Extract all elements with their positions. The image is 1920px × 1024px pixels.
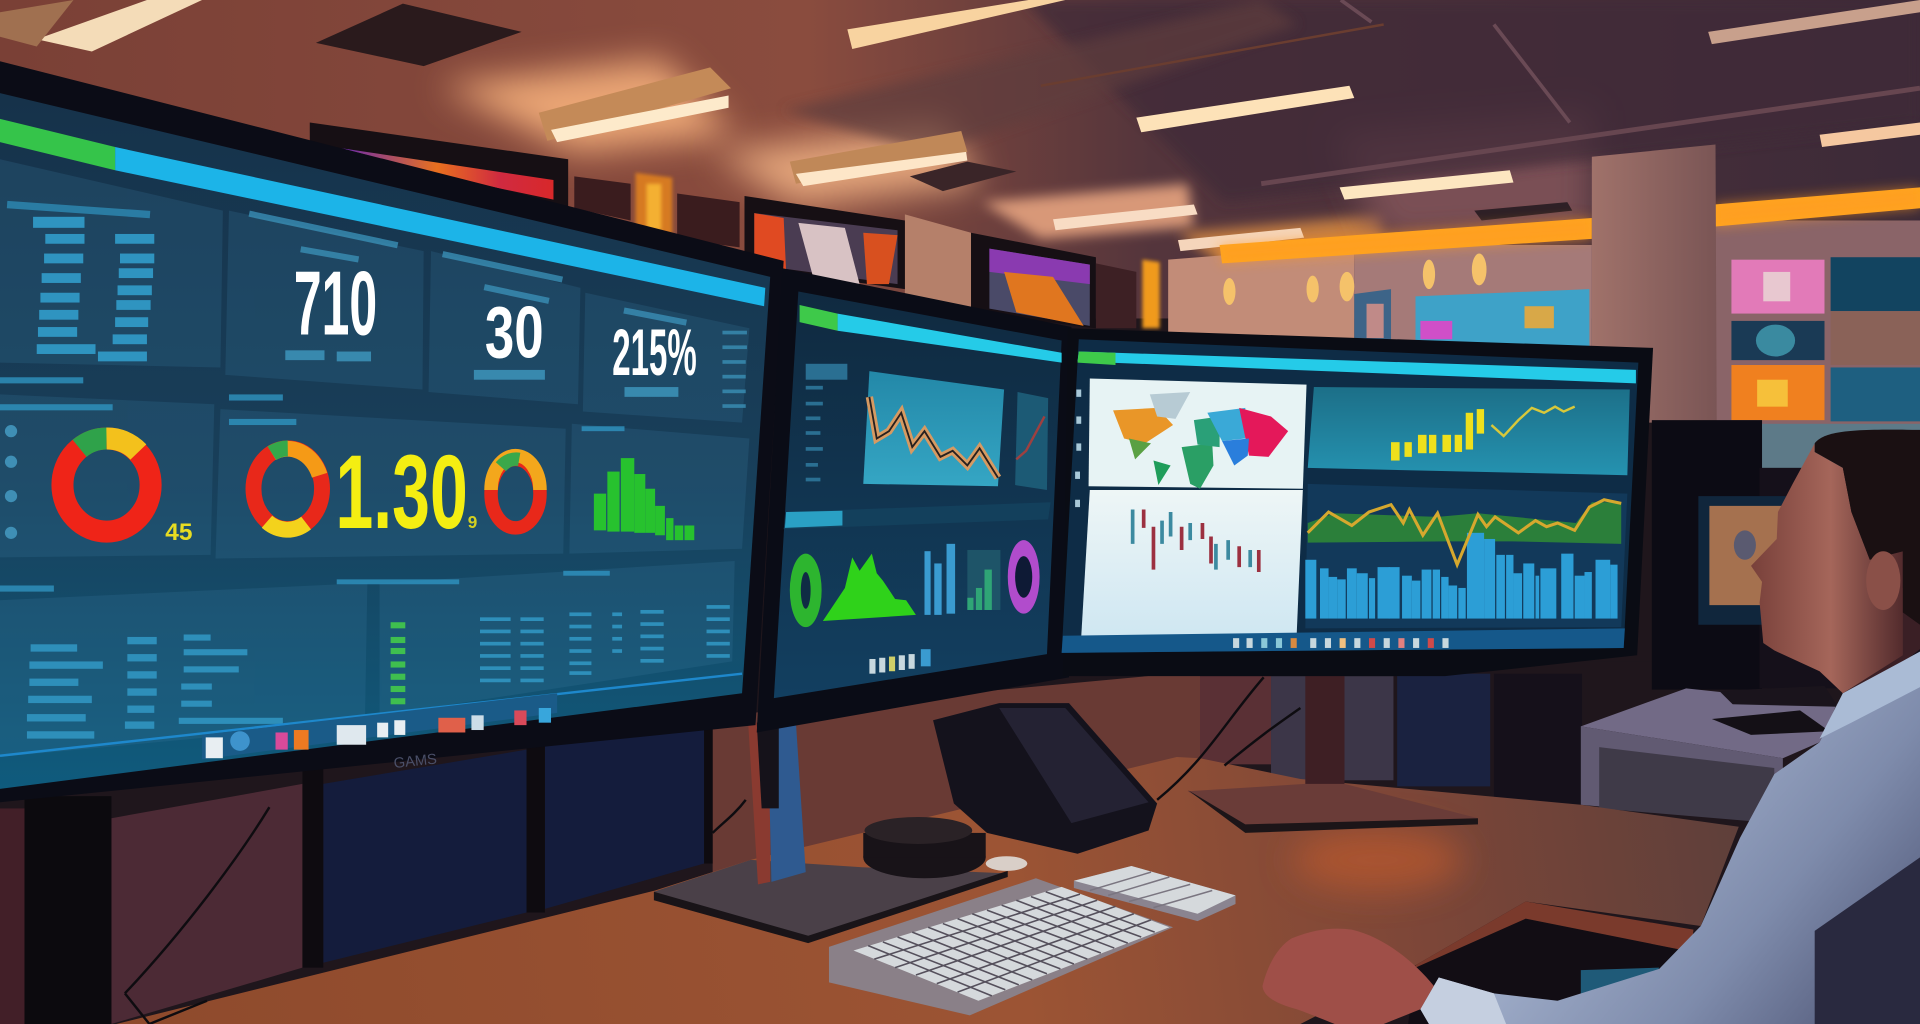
left monitor screen bbox=[0, 93, 770, 789]
orange LED strips bbox=[1220, 187, 1920, 263]
small yellow unit: 9 bbox=[468, 512, 477, 532]
table of bars, top-left bbox=[7, 201, 154, 361]
KPI 30: 30 bbox=[485, 291, 544, 374]
sidebar list bbox=[806, 364, 847, 481]
monitor brand label: GAMS bbox=[393, 752, 438, 772]
small side chart bbox=[1015, 392, 1048, 490]
hand bbox=[1262, 929, 1434, 1024]
sidebar icons bbox=[1075, 390, 1081, 507]
middle monitor stand bbox=[654, 723, 1008, 943]
side list bbox=[722, 331, 747, 408]
desk glow bbox=[1292, 828, 1463, 892]
middle monitor screen bbox=[774, 292, 1062, 698]
ceiling light panels bbox=[0, 0, 1920, 251]
neck bbox=[1774, 588, 1920, 693]
dashboard panels bbox=[0, 159, 749, 757]
desk notch bbox=[1408, 902, 1693, 1024]
donut chart 2 bbox=[253, 448, 322, 530]
green area chart bbox=[823, 554, 916, 621]
keyboard bbox=[829, 878, 1173, 1015]
middle monitor bezel bbox=[757, 268, 1071, 732]
left monitor bbox=[0, 61, 784, 802]
donut chart 3 bbox=[491, 456, 540, 528]
left monitor stand bbox=[24, 723, 713, 1024]
right monitor stand bbox=[1188, 668, 1478, 833]
side desk bbox=[1581, 686, 1838, 823]
person bbox=[1262, 430, 1920, 1024]
blue bars bbox=[924, 544, 955, 615]
candlestick panel bbox=[1081, 490, 1303, 637]
hair bbox=[1815, 430, 1920, 625]
pendant lights bbox=[1223, 254, 1487, 305]
dark shirt shadow bbox=[1815, 857, 1920, 1024]
left monitor bezel bbox=[0, 61, 784, 802]
face bbox=[1751, 443, 1903, 693]
map panel bbox=[1089, 378, 1307, 489]
taskbar icons bbox=[869, 649, 931, 674]
left monitor: 215% bbox=[612, 316, 697, 390]
cuff bbox=[1420, 977, 1506, 1024]
back wall lower and floor bbox=[0, 420, 1920, 1024]
wall screens bbox=[310, 122, 1920, 421]
donut side icons bbox=[5, 425, 17, 539]
donut chart 1: 45 bbox=[165, 519, 193, 546]
numeric keypad bbox=[1074, 866, 1236, 921]
candles bbox=[1133, 510, 1259, 572]
screen header bar bbox=[0, 119, 765, 306]
right monitor bbox=[1062, 328, 1653, 676]
ear bbox=[1866, 551, 1900, 610]
background small monitor bbox=[1698, 496, 1793, 625]
ceiling vent bbox=[316, 4, 522, 66]
map regions bbox=[1113, 392, 1288, 489]
green bar chart bbox=[594, 458, 694, 540]
KPI 710: 710 bbox=[294, 253, 377, 354]
header bar bbox=[1078, 352, 1636, 383]
lower panel strip bbox=[784, 502, 1051, 529]
shirt bbox=[1420, 652, 1920, 1024]
round desk device bbox=[863, 817, 1027, 878]
dim green bars bbox=[967, 550, 1000, 610]
purple ring bbox=[1008, 540, 1040, 614]
taskbar bbox=[202, 693, 557, 759]
lower tables bbox=[27, 605, 730, 739]
green ring bbox=[790, 554, 822, 627]
KPI 30 bbox=[442, 251, 563, 380]
middle monitor bbox=[757, 268, 1071, 732]
screen bottom line bbox=[0, 674, 742, 756]
cables bbox=[125, 677, 1300, 1024]
desk phone bbox=[933, 703, 1157, 854]
yellow bar and line chart bbox=[1308, 387, 1630, 475]
area and bars chart bbox=[1305, 484, 1627, 628]
donut chart 1 bbox=[62, 438, 193, 546]
main desk bbox=[116, 757, 1739, 1024]
KPI 710 bbox=[249, 211, 398, 361]
collar bbox=[1820, 652, 1920, 739]
yellow value 1.30: 1.30 bbox=[336, 434, 468, 551]
taskbar icons bbox=[1233, 638, 1449, 648]
panel titles bbox=[0, 377, 624, 592]
right monitor screen bbox=[1062, 339, 1638, 653]
line chart panel bbox=[863, 371, 1004, 486]
KPI 215% bbox=[612, 307, 697, 397]
header bar bbox=[800, 305, 1062, 363]
taskbar strip bbox=[1062, 628, 1625, 653]
pillar bbox=[1592, 145, 1717, 423]
right monitor bezel bbox=[1063, 328, 1653, 676]
